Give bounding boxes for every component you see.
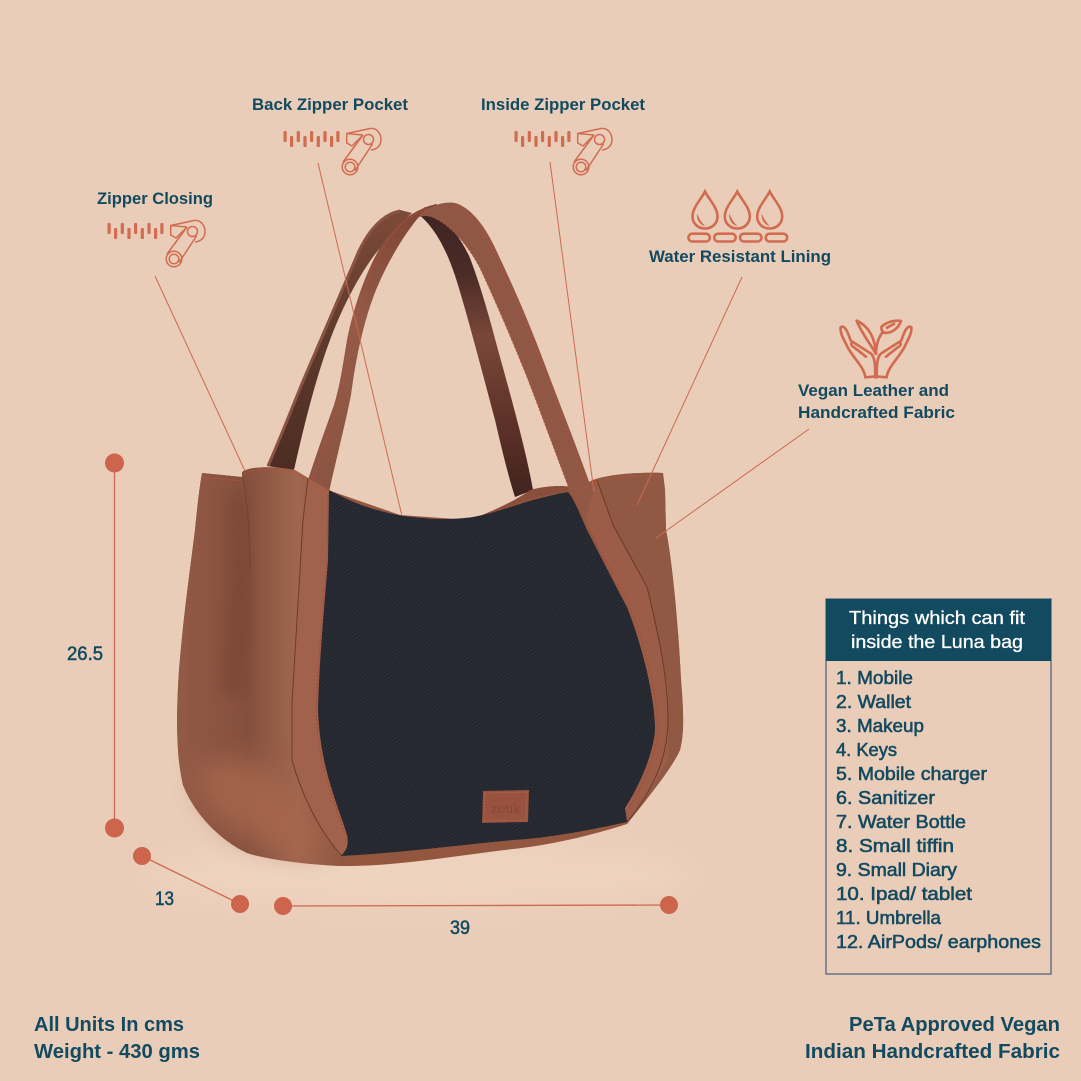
footer: certifications: Indian Handcrafted Fabric bbox=[805, 1041, 1060, 1063]
footer: certifications: PeTa Approved Vegan bbox=[849, 1014, 1060, 1036]
list of items: 1. Mobile bbox=[836, 668, 913, 688]
leader line: inside zipper pocket bbox=[550, 162, 594, 492]
product photo: Luna tote bag bbox=[177, 202, 683, 866]
callout: back zipper pocket: Back Zipper Pocket bbox=[252, 95, 408, 114]
callout: inside zipper pocket: Inside Zipper Pocket bbox=[481, 95, 645, 114]
list of items: 11. Umbrella bbox=[836, 908, 942, 928]
callout: back zipper pocket bbox=[252, 95, 408, 175]
icon: back zipper bbox=[284, 128, 381, 175]
list of items: 9. Small Diary bbox=[836, 860, 957, 880]
list of items: 3. Makeup bbox=[836, 716, 924, 736]
callout: vegan leather and handcrafted fabric: Handcrafted Fabric bbox=[798, 403, 955, 422]
dimension: height 26.5 bbox=[67, 454, 124, 838]
list of items: 7. Water Bottle bbox=[836, 812, 966, 832]
black canvas fabric panel bbox=[318, 490, 655, 856]
right inner strip bbox=[585, 480, 668, 822]
leader line: back zipper pocket bbox=[318, 163, 402, 516]
dimension: depth 13: 13 bbox=[155, 889, 174, 910]
list of items: 2. Wallet bbox=[836, 692, 911, 712]
back-right strap bbox=[418, 207, 533, 497]
panel header: Things which can fit bbox=[849, 608, 1025, 628]
dimension: height 26.5: 26.5 bbox=[67, 644, 103, 665]
callout: water resistant lining: Water Resistant Lining bbox=[649, 247, 831, 266]
list of items: 10. Ipad/ tablet bbox=[836, 884, 972, 904]
list of items: 12. AirPods/ earphones bbox=[836, 932, 1041, 952]
left side panel shading bbox=[177, 467, 345, 866]
front-left strap bbox=[308, 204, 440, 492]
callout: zipper closing bbox=[97, 189, 213, 267]
leader line: vegan leather bbox=[656, 429, 809, 538]
callout: inside zipper pocket bbox=[481, 95, 645, 175]
left front strip bbox=[292, 478, 348, 856]
dimension: depth 13 bbox=[133, 847, 249, 913]
list of items: 4. Keys bbox=[836, 740, 897, 760]
brand patch bbox=[482, 790, 529, 823]
footer: certifications bbox=[805, 1014, 1060, 1063]
icon: water drops over lining bbox=[688, 192, 787, 242]
right side panels bbox=[573, 473, 683, 824]
footer: units and weight bbox=[34, 1014, 200, 1063]
bag body silhouette bbox=[177, 467, 683, 866]
icon: zipper closing bbox=[108, 220, 205, 267]
leader line: zipper closing bbox=[155, 276, 245, 471]
leader line: water resistant lining bbox=[637, 277, 742, 505]
list of items: 5. Mobile charger bbox=[836, 764, 987, 784]
left side lower highlight bbox=[195, 758, 325, 852]
soft studio light behind bag bbox=[150, 845, 690, 905]
brand patch: zouk bbox=[491, 801, 521, 817]
callout: water resistant lining bbox=[649, 192, 831, 266]
callout: vegan leather and handcrafted fabric: Vegan Leather and bbox=[798, 381, 949, 400]
callout: vegan leather and handcrafted fabric bbox=[798, 321, 955, 422]
back-left strap bbox=[267, 210, 412, 470]
list of items: 6. Sanitizer bbox=[836, 788, 935, 808]
left pleat shadow bbox=[218, 490, 250, 700]
dimension: width 39 bbox=[274, 896, 678, 939]
panel header bbox=[826, 599, 1051, 661]
icon: hands holding plant bbox=[841, 321, 911, 377]
icon: inside zipper bbox=[514, 128, 612, 175]
footer: units and weight: Weight - 430 gms bbox=[34, 1041, 200, 1063]
callout: zipper closing: Zipper Closing bbox=[97, 189, 213, 208]
list of items bbox=[836, 668, 1041, 952]
fabric stitching bbox=[316, 495, 345, 835]
dimension: width 39: 39 bbox=[450, 918, 470, 939]
front-right strap bbox=[420, 202, 592, 496]
panel: things which can fit bbox=[826, 599, 1051, 974]
panel header: inside the Luna bag bbox=[851, 632, 1023, 652]
bag interior lining bbox=[470, 486, 580, 525]
footer: units and weight: All Units In cms bbox=[34, 1014, 184, 1036]
list of items: 8. Small tiffin bbox=[836, 836, 954, 856]
